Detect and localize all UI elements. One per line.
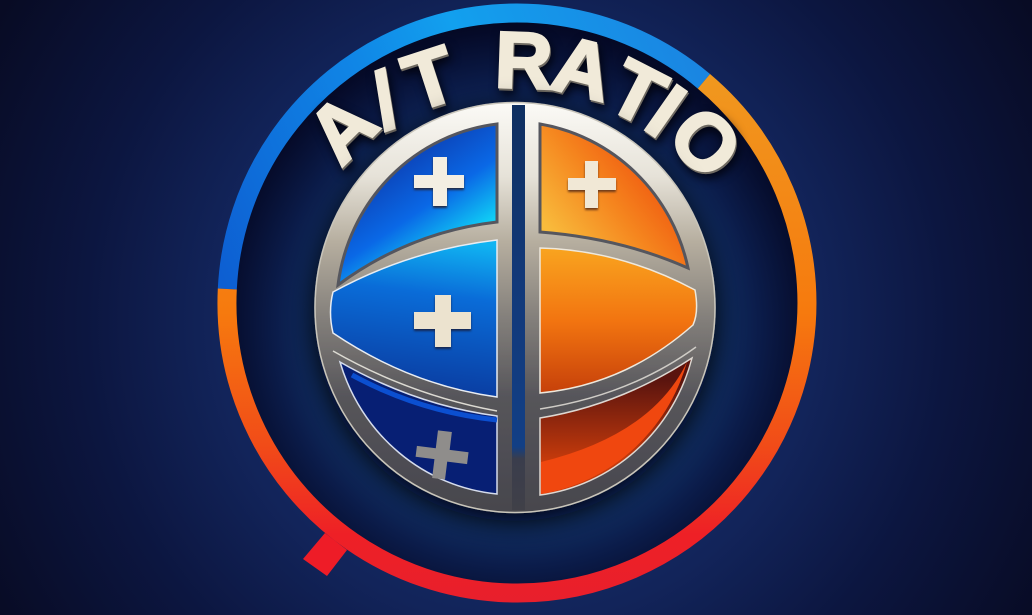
center channel	[512, 105, 525, 510]
panel: lower right bright strip	[541, 362, 687, 494]
plus: middle	[414, 295, 471, 347]
ring	[227, 13, 807, 593]
plus: lower	[413, 428, 471, 482]
band line: lower left	[333, 351, 497, 411]
inner dark disc	[233, 19, 801, 587]
ring segment: orange to red	[227, 81, 807, 593]
plus: upper right	[568, 161, 616, 208]
ring segment: blue	[227, 13, 704, 289]
panel: lower right dark orange	[540, 358, 692, 495]
sphere metal body	[315, 102, 715, 512]
band line: lower right	[540, 347, 696, 409]
emblem sphere	[315, 102, 715, 512]
title: A/T RATIO	[290, 15, 759, 196]
panel: lower left navy	[340, 362, 497, 494]
panel: upper left blue	[338, 124, 497, 285]
ring tick	[303, 533, 347, 576]
panel: middle right orange	[540, 248, 697, 393]
panel: middle left blue	[330, 240, 497, 397]
panel: upper right orange	[540, 124, 688, 268]
plus: upper left	[414, 157, 464, 206]
panel: lower left blue strip	[352, 375, 497, 420]
